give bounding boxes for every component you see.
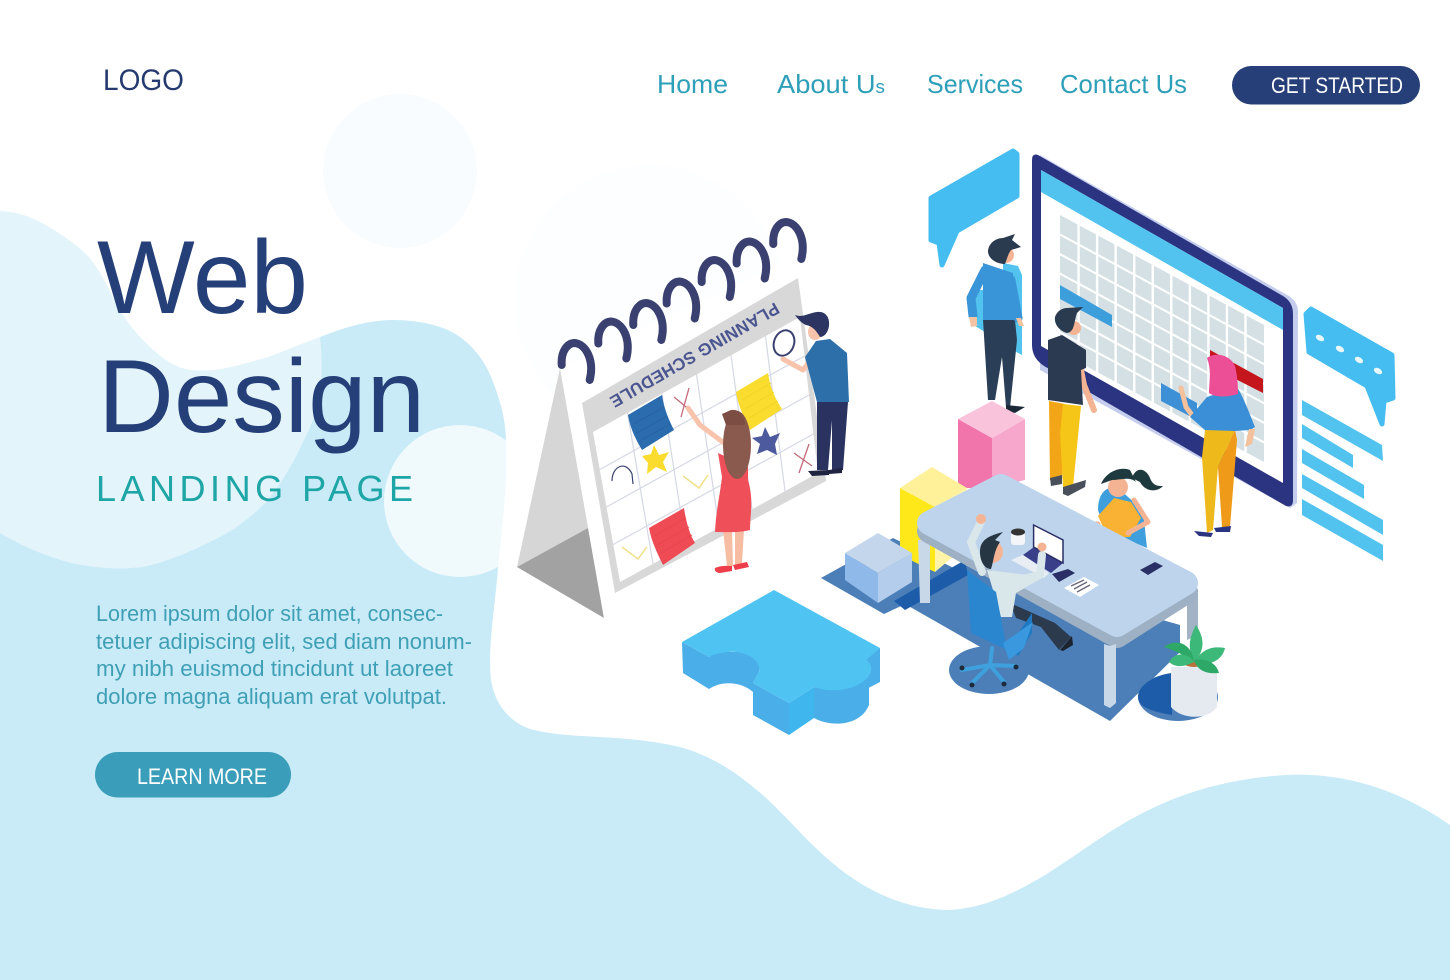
pale top-left blob <box>0 211 322 568</box>
blue panel behind <box>975 263 1022 355</box>
mat shade <box>1138 673 1172 715</box>
bubble shape <box>1306 309 1393 424</box>
chair mat <box>949 646 1029 694</box>
orange-top woman <box>1065 469 1163 548</box>
body paragraph: tetuer adipiscing elit, sed diam nonum- <box>96 629 472 654</box>
nav about: About U s <box>777 69 885 99</box>
top <box>1098 498 1141 538</box>
neck <box>1067 321 1081 335</box>
main light blue wave <box>0 320 1450 980</box>
nav services: Services <box>927 69 1023 99</box>
pointing arm <box>1181 388 1192 415</box>
body paragraph: dolore magna aliquam erat volutpat. <box>96 684 447 709</box>
desk edge <box>929 492 1186 636</box>
hair <box>1055 307 1083 333</box>
shoes <box>715 562 749 573</box>
shirt <box>987 570 1044 617</box>
trousers <box>1010 603 1071 650</box>
left face <box>900 488 935 572</box>
shirt <box>983 263 1015 320</box>
head <box>1108 477 1128 497</box>
person in black shirt <box>1048 307 1094 496</box>
pink box <box>958 401 1025 488</box>
man at calendar <box>783 312 849 476</box>
shirt <box>805 339 849 402</box>
tab left face <box>753 683 789 735</box>
top face <box>682 590 880 703</box>
leaves <box>1164 625 1225 673</box>
pink hair <box>1207 355 1238 396</box>
learn more button <box>95 752 291 798</box>
trousers yellow <box>1202 430 1235 533</box>
title web: Web <box>97 220 308 336</box>
trousers <box>817 402 848 470</box>
circle mark <box>770 327 798 359</box>
mat overlap shadow <box>894 560 968 610</box>
neck <box>808 324 822 340</box>
shoe <box>1060 636 1073 651</box>
arc mark <box>612 466 633 484</box>
arms <box>1065 500 1148 533</box>
person in blue shirt <box>969 234 1025 413</box>
hair <box>795 312 829 337</box>
trousers yellow <box>1060 404 1081 487</box>
calendar base shadow <box>517 528 604 618</box>
person with pink hair <box>1181 355 1255 537</box>
floor mats <box>821 538 1180 721</box>
raised arm <box>688 408 724 443</box>
arm <box>783 358 812 370</box>
top face <box>900 467 967 507</box>
hair <box>1101 469 1163 490</box>
desk calendar <box>517 222 842 618</box>
yellow box <box>900 467 967 572</box>
body paragraph: Lorem ipsum dolor sit amet, consec- <box>96 601 443 626</box>
schedule grid <box>1060 215 1264 462</box>
second blue bar <box>1161 383 1197 420</box>
right face <box>878 553 912 603</box>
faint circle behind calendar <box>515 165 785 435</box>
hand on laptop <box>1038 542 1046 552</box>
raised arm <box>971 522 1042 582</box>
cross mark one <box>674 388 691 417</box>
shoes <box>1050 475 1086 496</box>
calendar rings <box>562 222 803 380</box>
soil <box>1185 661 1203 667</box>
calendar frame <box>582 278 826 593</box>
arm <box>1080 365 1094 410</box>
title design: Design <box>98 339 425 455</box>
monitor body <box>1032 155 1293 506</box>
speech bubble left <box>931 151 1017 265</box>
yellow sticky note <box>736 373 782 430</box>
cross mark two <box>794 444 812 473</box>
purple star <box>752 427 780 455</box>
seated man <box>967 514 1073 660</box>
shirt <box>1048 335 1086 405</box>
calendar heading: PLANNING SCHEDULE <box>607 299 782 411</box>
wheel spokes <box>962 648 1016 683</box>
back left leg <box>918 540 930 603</box>
red schedule bar <box>1210 350 1263 393</box>
pot <box>1171 667 1217 717</box>
calendar side <box>517 368 604 618</box>
pot mat <box>1138 673 1218 721</box>
trousers <box>983 320 1017 408</box>
cube mat <box>821 538 968 614</box>
hands <box>969 317 1024 327</box>
phone one <box>1052 569 1075 582</box>
top face <box>958 401 1025 438</box>
blue schedule bar <box>1060 285 1112 327</box>
potted plant <box>1138 625 1225 721</box>
faint circle upper <box>323 94 477 248</box>
front leg <box>1104 644 1116 708</box>
knob side <box>814 673 869 724</box>
light blue cube <box>845 533 912 603</box>
legs <box>723 530 744 566</box>
wheels <box>960 664 1018 688</box>
shoe <box>1006 405 1025 413</box>
get started button: GET STARTED <box>1271 73 1403 98</box>
hand <box>1245 429 1255 447</box>
office chair base <box>949 646 1029 694</box>
paper sheet <box>1064 577 1099 597</box>
nav contact: Contact Us <box>1060 69 1187 99</box>
blue sticky note <box>628 395 674 450</box>
speech bubble right <box>1306 309 1393 424</box>
left face <box>958 419 992 488</box>
calendar grid <box>600 336 814 564</box>
laptop <box>1011 525 1063 578</box>
red sticky note <box>649 508 695 565</box>
top face <box>845 533 912 573</box>
puzzle piece <box>682 590 880 735</box>
woman at calendar <box>688 408 751 573</box>
head hair top <box>722 410 745 425</box>
calendar cells <box>593 317 818 582</box>
logo: LOGO <box>103 64 184 97</box>
body paragraph <box>96 601 472 709</box>
translucent circle lower <box>384 425 536 577</box>
head <box>998 247 1014 263</box>
shoes <box>1194 526 1231 537</box>
right face <box>935 488 967 572</box>
coffee mug <box>1011 528 1025 545</box>
subtitle: LANDING PAGE <box>96 468 413 509</box>
nav home: Home <box>657 69 728 99</box>
large monitor <box>1032 155 1298 508</box>
check mark one <box>683 475 708 488</box>
desk top <box>929 486 1186 625</box>
bubble dots <box>1315 333 1383 376</box>
fist <box>976 514 986 524</box>
left side <box>682 642 709 689</box>
shirt <box>1190 387 1255 431</box>
check mark two <box>622 547 647 559</box>
desk <box>918 486 1198 708</box>
shoes <box>808 468 842 476</box>
desk mat <box>905 565 1180 721</box>
right face <box>992 419 1025 488</box>
left face <box>845 553 878 603</box>
body paragraph: my nibh euismod tincidunt ut laoreet <box>96 656 453 681</box>
trousers orange <box>1218 430 1237 527</box>
get started button <box>1232 66 1420 104</box>
phone two <box>1140 562 1163 575</box>
back right leg <box>1187 590 1198 640</box>
arms <box>971 270 1018 318</box>
screen header band <box>1041 170 1283 330</box>
hair <box>723 411 751 479</box>
hair <box>980 532 1003 569</box>
notch wall <box>709 652 762 692</box>
dress <box>715 453 751 532</box>
right end wall <box>855 648 880 695</box>
head <box>981 541 1003 563</box>
chair seat <box>1003 622 1033 660</box>
learn more button: LEARN MORE <box>137 764 267 789</box>
yellow star <box>642 445 669 474</box>
tab right face <box>789 687 814 735</box>
chair back <box>1098 488 1147 548</box>
text lines panel <box>1302 400 1383 561</box>
calendar page <box>560 255 842 618</box>
chair arm <box>1007 613 1032 656</box>
navigation <box>657 69 1187 99</box>
hair <box>988 234 1021 264</box>
monitor back edge <box>1040 155 1298 508</box>
chair back <box>967 570 1007 650</box>
trousers orange <box>1049 401 1065 480</box>
monitor screen <box>1041 170 1283 483</box>
